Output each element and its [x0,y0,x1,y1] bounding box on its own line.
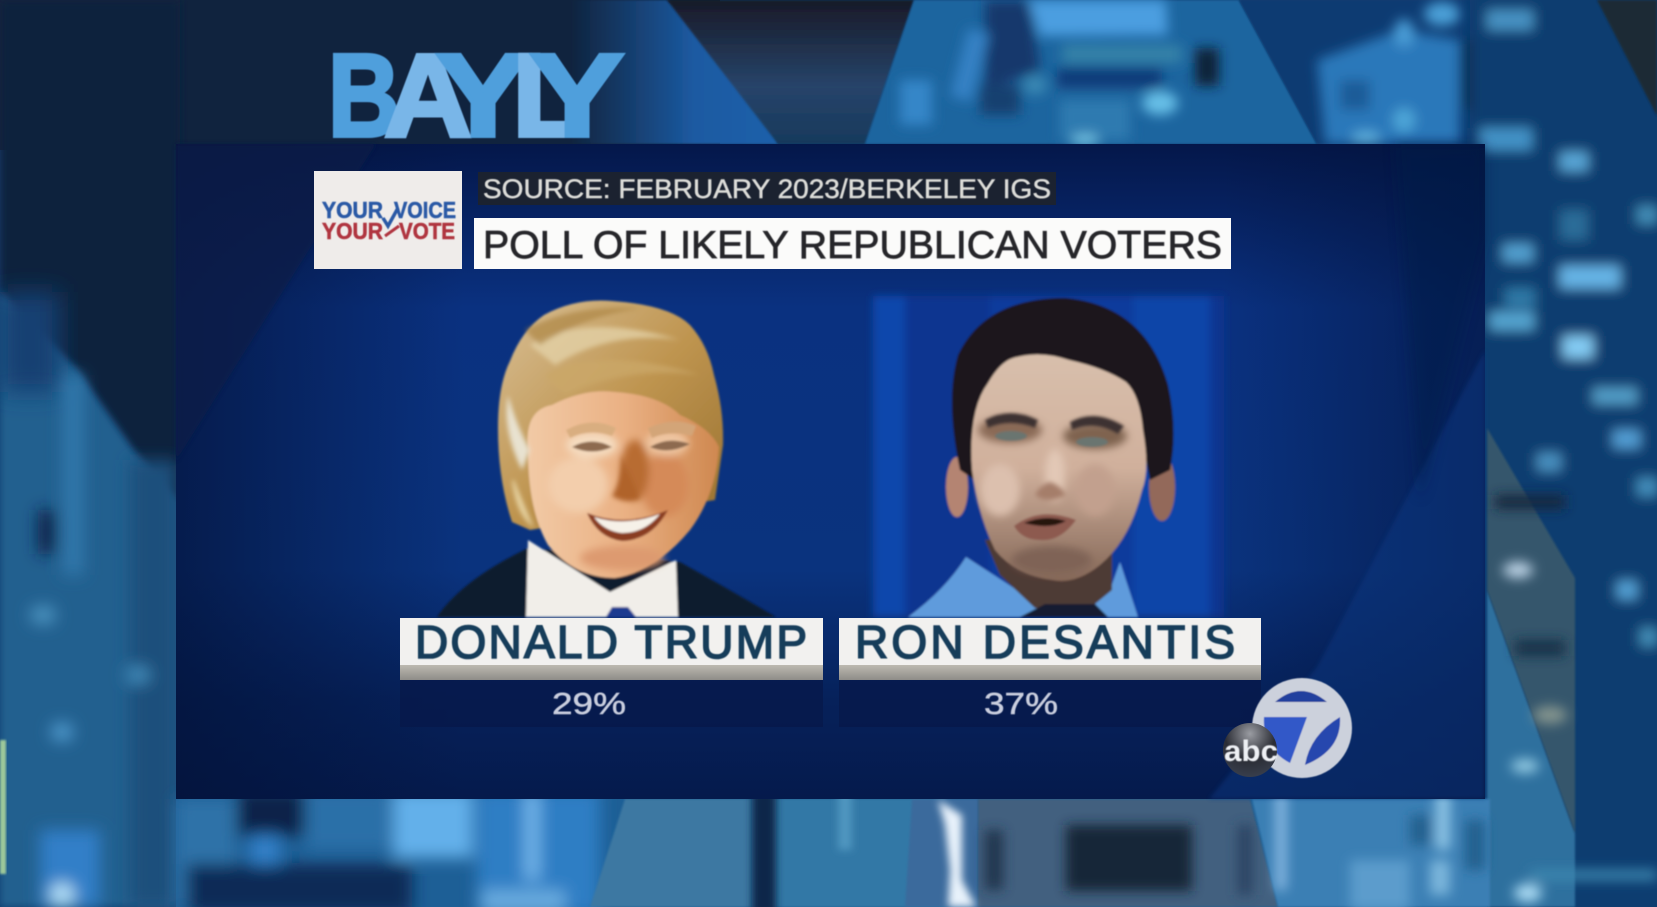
logo: your voice your vote: YOUR [322,218,383,244]
hair back [498,301,723,530]
logo: BAYLY: A [384,30,472,162]
shirt [908,557,1138,617]
bottom strip [176,799,1487,907]
shirt [526,540,678,617]
backdrop stripes [873,296,1224,617]
value: DeSantis 37% [839,680,1261,727]
neck [985,530,1112,608]
logo: your voice your vote [314,171,462,269]
portrait: Ron DeSantis [873,296,1224,617]
left tower details [30,375,177,907]
logo: BAYLY [328,30,624,162]
panel: poll graphic [176,144,1485,799]
logo: BAYLY: Y [530,30,624,162]
logo: BAYLY: Y [436,30,530,162]
face [528,391,719,578]
brows and eyes [566,422,616,438]
value: Trump 29%: 29% [552,686,626,721]
top right [1239,0,1500,144]
logo: your voice your vote: YOUR [322,197,383,223]
value: Trump 29% [400,680,823,727]
top centre [570,0,778,144]
icon: abc 7 logo [1223,678,1352,778]
logo: your voice your vote: VOTE [399,218,455,244]
right side blocks [1470,0,1657,907]
icon: abc 7 logo: abc [1224,735,1278,768]
ears [946,457,968,517]
logo: BAYLY: B [328,30,400,162]
value: DeSantis 37%: 37% [984,686,1058,721]
nose [1035,482,1066,500]
suit [437,548,776,617]
name bar: Donald Trump: DONALD TRUMP [415,616,807,668]
logo: your voice your vote: VOICE [394,197,456,223]
nose [612,455,640,501]
heading: POLL OF LIKELY REPUBLICAN VOTERS [483,224,1222,267]
mouth [1014,514,1076,540]
source line: SOURCE: FEBRUARY 2023/BERKELEY IGS [483,174,1051,204]
hair [952,298,1174,480]
hair highlights [507,308,700,528]
name bar: Ron DeSantis: RON DESANTIS [855,616,1235,668]
green sliver [0,740,6,874]
smile [587,510,668,541]
portrait: Donald Trump [437,301,776,617]
logo: BAYLY: L [512,30,588,162]
top-left navy [0,0,720,907]
brows and eyes [985,413,1038,428]
face [971,354,1146,581]
